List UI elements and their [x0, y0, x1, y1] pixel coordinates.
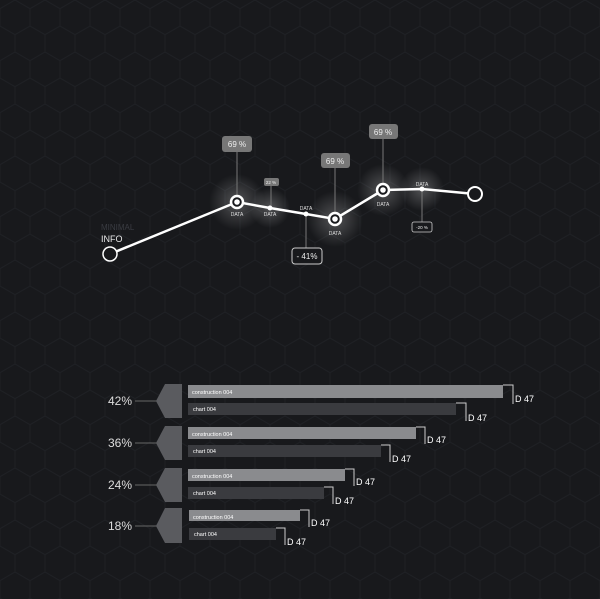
data labels: DATA	[377, 202, 390, 208]
nodes	[103, 184, 482, 261]
group 36%: D 47	[392, 454, 411, 464]
group 42%	[108, 384, 534, 423]
data labels: DATA	[300, 206, 313, 212]
group 24%: D 47	[335, 496, 354, 506]
group 36%: construction 004	[192, 432, 232, 438]
callouts: 69 %	[374, 128, 392, 137]
title: minimal info: MINIMAL	[101, 223, 135, 232]
title: minimal info: INFO	[101, 234, 122, 244]
data labels: DATA	[416, 182, 429, 188]
group 42%: 42%	[108, 394, 132, 408]
callouts: 69 %	[228, 140, 246, 149]
group 24%: 24%	[108, 478, 132, 492]
group 18%: 18%	[108, 519, 132, 533]
group 18%: D 47	[287, 537, 306, 547]
group 36%	[108, 426, 446, 464]
callouts: 69 %	[326, 157, 344, 166]
group 36%: 36%	[108, 436, 132, 450]
data labels	[231, 182, 429, 237]
callouts: - 41%	[297, 252, 317, 261]
group 24%: chart 004	[193, 491, 216, 497]
group 36%: D 47	[427, 435, 446, 445]
data labels: DATA	[264, 212, 277, 218]
group 18%	[108, 508, 330, 547]
group 42%: construction 004	[192, 390, 232, 396]
group 42%: D 47	[515, 394, 534, 404]
group 24%: construction 004	[192, 474, 232, 480]
group 18%: chart 004	[194, 532, 217, 538]
data labels: DATA	[231, 212, 244, 218]
data labels: DATA	[329, 231, 342, 237]
title: minimal info	[101, 223, 135, 244]
group 36%: chart 004	[193, 449, 216, 455]
group 42%: D 47	[468, 413, 487, 423]
bar chart	[108, 384, 534, 547]
group 42%: chart 004	[193, 407, 216, 413]
group 24%: D 47	[356, 477, 375, 487]
callouts	[222, 124, 432, 264]
group 24%	[108, 468, 375, 506]
group 18%: construction 004	[193, 515, 233, 521]
group 18%: D 47	[311, 518, 330, 528]
callouts: -20 %	[416, 225, 428, 230]
data line	[110, 189, 475, 254]
line chart	[101, 124, 482, 264]
callouts: 22 %	[266, 180, 276, 185]
connectors	[237, 139, 422, 248]
